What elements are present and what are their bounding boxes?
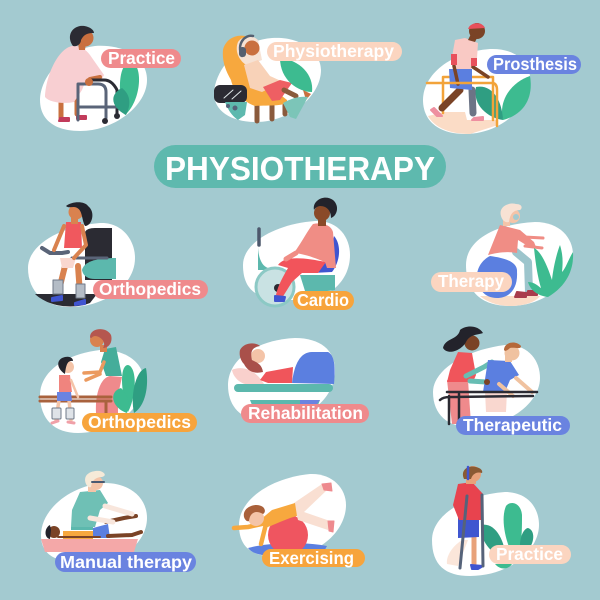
icon: plant and blanket — [280, 58, 312, 119]
icon: woman on bike — [275, 198, 337, 301]
icon: parallel bar — [40, 397, 111, 414]
icon: woman exercising — [52, 202, 92, 305]
icon: peach floor — [480, 296, 540, 306]
icon: blue bolster — [292, 352, 335, 384]
label: Physiotherapy: Physiotherapy — [273, 41, 394, 61]
panel: prosthesis — [423, 23, 581, 134]
label: Therapeutic: Therapeutic — [463, 415, 562, 435]
icon: exercise ball — [268, 515, 308, 555]
label: Therapy: Therapy — [438, 271, 504, 291]
panel: exercising — [234, 474, 365, 568]
icon: VR headset — [214, 85, 247, 120]
panel: practice with crutches — [432, 466, 571, 576]
label: Cardio: Cardio — [297, 290, 349, 310]
icon: woman lying — [240, 343, 293, 383]
icon: pillow — [232, 368, 264, 384]
icon: man on crutches — [447, 466, 483, 569]
panel: orthopedics child — [40, 329, 197, 433]
icon: therapist — [84, 329, 122, 413]
label: Orthopedics: Orthopedics — [99, 279, 201, 299]
icon: man on parallel bars — [427, 23, 497, 126]
icon: plant — [475, 76, 531, 120]
label: Exercising: Exercising — [269, 548, 354, 568]
panel: cardio — [243, 198, 354, 310]
icon: exercise bike — [256, 229, 339, 306]
panel: physiotherapy with VR — [214, 36, 402, 122]
label: Practice: Practice — [108, 48, 175, 68]
icon: steps — [428, 112, 498, 134]
icon: treatment table — [234, 384, 333, 405]
label: Rehabilitation: Rehabilitation — [248, 403, 363, 423]
icon: plant — [113, 365, 147, 413]
icon: mat — [248, 543, 327, 555]
icon: exercise machine — [35, 228, 116, 306]
label: Practice: Practice — [496, 544, 563, 564]
icon: senior woman — [488, 204, 543, 297]
icon: patient lying — [46, 516, 141, 539]
icon: parallel bars — [440, 392, 537, 424]
label: Manual therapy: Manual therapy — [60, 552, 192, 572]
icon: treatment bed — [41, 539, 138, 552]
icon: plant — [113, 62, 139, 115]
panel: therapy ball — [431, 204, 573, 306]
label: Prosthesis: Prosthesis — [493, 54, 577, 74]
icon: plants — [481, 503, 533, 568]
icon: child — [52, 357, 78, 423]
panel: practice with walker — [40, 26, 181, 131]
icon: therapist — [71, 471, 132, 530]
icon: patient man — [483, 343, 532, 412]
icon: woman with walker — [45, 26, 120, 124]
panel: orthopedics machine — [28, 202, 208, 307]
panel: rehabilitation — [228, 338, 369, 423]
panel: therapeutic — [433, 327, 570, 435]
icon: exercise ball — [477, 256, 517, 298]
label: Orthopedics: Orthopedics — [88, 412, 191, 432]
icon: person on ball — [234, 483, 334, 544]
icon: plant — [528, 245, 573, 297]
panel: manual therapy — [41, 471, 196, 572]
icon: therapist woman — [443, 327, 492, 424]
title: PHYSIOTHERAPY — [165, 150, 435, 187]
icon: woman in chair — [223, 36, 296, 121]
